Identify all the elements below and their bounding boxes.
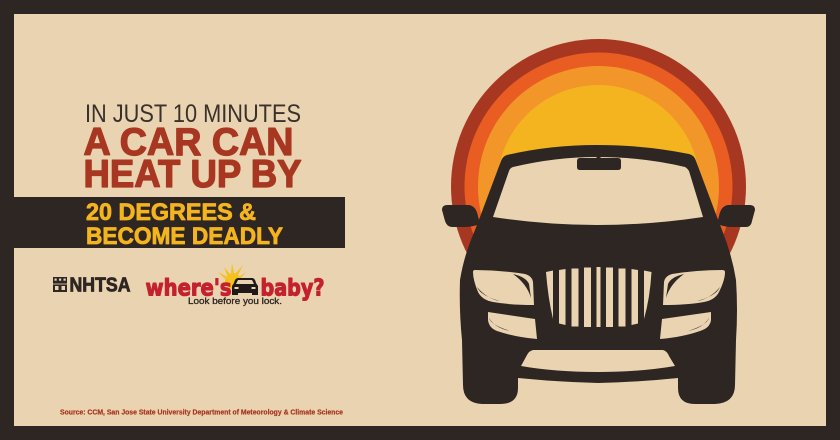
NHTSA logo: NHTSA <box>70 274 130 296</box>
right fog light <box>660 312 711 339</box>
icon: NHTSA seal squares <box>53 277 67 292</box>
headline line: heat up by: HEAT UP BY <box>84 153 302 196</box>
headline line: a car can: A CAR CAN <box>84 121 294 164</box>
where's baby logo <box>146 263 324 306</box>
right side mirror <box>717 205 755 227</box>
headline <box>84 100 302 196</box>
right headlight <box>663 270 725 305</box>
dark banner with yellow text: 20 DEGREES & <box>86 199 256 226</box>
left side mirror <box>442 205 480 227</box>
grille slats <box>546 267 652 327</box>
source note: Source: CCM, San Jose State University Department of Meteorology & Climate Science <box>60 410 343 416</box>
left headlight <box>473 270 534 305</box>
car body <box>460 145 737 404</box>
where's baby logo: where's <box>146 276 232 302</box>
windshield <box>493 157 703 225</box>
lower bumper opening <box>521 350 675 372</box>
car <box>442 145 755 404</box>
headline line: in just 10 minutes: IN JUST 10 MINUTES <box>85 100 301 128</box>
sun rings <box>451 39 746 334</box>
dark banner with yellow text: BECOME DEADLY <box>86 223 283 250</box>
left fog light <box>488 312 537 339</box>
rearview mirror <box>577 155 621 170</box>
dark banner with yellow text <box>14 197 345 250</box>
icon: small car <box>232 278 258 295</box>
icon: small sun rays <box>218 263 246 289</box>
where's baby logo: baby? <box>260 276 324 302</box>
where's baby logo: Look before you lock. <box>188 296 282 306</box>
